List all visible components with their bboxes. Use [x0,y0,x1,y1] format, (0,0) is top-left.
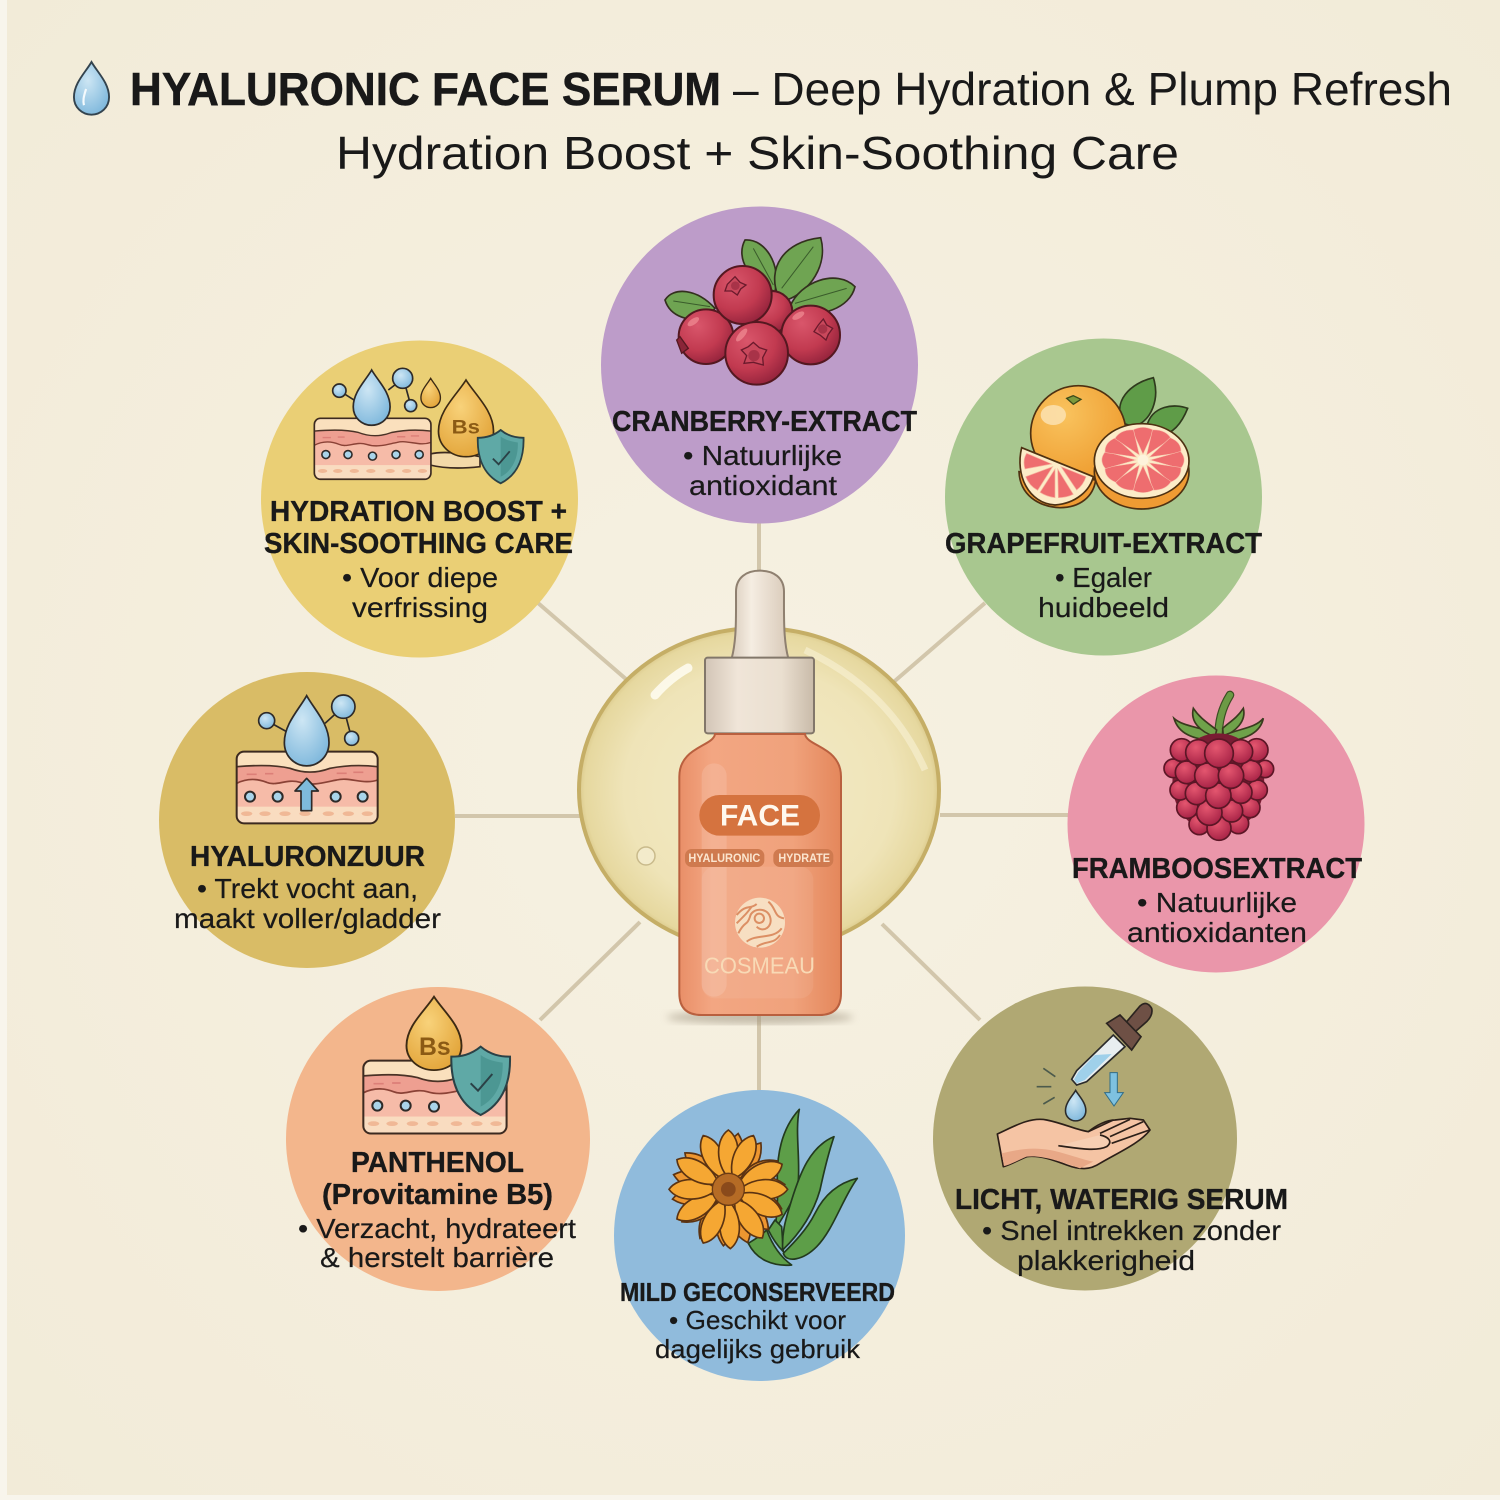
label: FACE: FACE [720,799,800,832]
heading [322,1147,553,1211]
description: • Egaler [1055,562,1152,593]
description [298,1213,576,1273]
description: dagelijks gebruik [655,1334,861,1364]
brand name: COSMEAU [704,952,815,978]
description [655,1305,861,1364]
description: • Natuurlijke [1137,887,1297,918]
description: • Natuurlijke [683,440,842,471]
label: HYDRATE [773,849,833,867]
heading [264,496,573,560]
icon: calendula and aloe [669,1109,857,1265]
icon: skin, drops and shield: Bs [452,417,480,438]
icon: water drop [74,62,109,115]
bottle shadow [667,1011,853,1024]
title line 1: HYALURONIC FACE SERUM [130,63,721,115]
description: verfrissing [352,592,488,623]
cut half [1094,434,1189,509]
panel: mildly preserved [614,1090,905,1381]
collar [705,658,814,733]
description: • Trekt vocht aan, [197,873,418,904]
description: huidbeeld [1038,592,1169,623]
small bubble [637,847,655,865]
central serum droplet [579,628,939,952]
description [1127,887,1307,948]
hand [997,1118,1150,1169]
panel: hydration boost [261,340,578,658]
panel: light watery serum [933,986,1288,1290]
heading: LICHT, WATERIG SERUM [955,1184,1288,1216]
panel: raspberry extract [1068,676,1364,972]
connector lines [455,520,1070,1092]
bottle body [679,734,841,1015]
panel: cranberry extract [601,206,918,524]
description: antioxidant [689,470,837,501]
dropper bulb [732,571,788,658]
icon: skin with vitamin B5 and shield: Bs [419,1033,451,1061]
description: • Geschikt voor [669,1305,846,1335]
heading: GRAPEFRUIT-EXTRACT [945,528,1262,560]
description [174,873,441,934]
panel: hyaluronic acid [159,672,455,968]
serum bottle [667,571,853,1024]
icon: dropper and hand [997,1003,1152,1169]
description: antioxidanten [1127,917,1307,948]
description [683,440,842,501]
heading: HYALURONZUUR [190,841,425,873]
icon: skin with vitamin B5 and shield [363,997,510,1133]
title [74,62,1452,179]
description: & herstelt barrière [320,1242,554,1273]
water drop [1065,1090,1086,1121]
description [342,562,498,623]
description: • Verzacht, hydrateert [298,1213,576,1244]
heading: CRANBERRY-EXTRACT [612,406,917,438]
panel: grapefruit extract [945,338,1262,656]
description: plakkerigheid [1017,1245,1195,1276]
dropper [1072,1003,1152,1085]
heading: PANTHENOL [351,1147,524,1179]
icon: cranberries [665,238,855,385]
arrow [1105,1073,1123,1106]
icon: raspberry [1164,695,1274,840]
heading: MILD GECONSERVEERD [620,1277,895,1307]
description: • Snel intrekken zonder [982,1215,1281,1246]
description [1038,562,1169,623]
description [982,1215,1281,1276]
heading: SKIN-SOOTHING CARE [264,528,573,560]
wedge [1019,472,1096,508]
label: FACE [699,795,820,836]
label: HYALURONIC: HYALURONIC [688,851,761,865]
logo mark [735,898,785,948]
icon: grapefruit [1019,378,1189,509]
heading: FRAMBOOSEXTRACT [1072,853,1362,885]
heading: HYDRATION BOOST + [270,496,567,528]
icon: skin, drops and shield [314,368,524,483]
description: maakt voller/gladder [174,903,441,934]
title line 2: Hydration Boost + Skin-Soothing Care [336,127,1179,179]
icon: skin with water drop [237,695,378,823]
panel: panthenol [286,987,590,1291]
description: • Voor diepe [342,562,498,593]
label: HYDRATE: HYDRATE [778,851,830,865]
heading: (Provitamine B5) [322,1179,553,1211]
title line 1 subtitle: – Deep Hydration & Plump Refresh [733,63,1452,115]
